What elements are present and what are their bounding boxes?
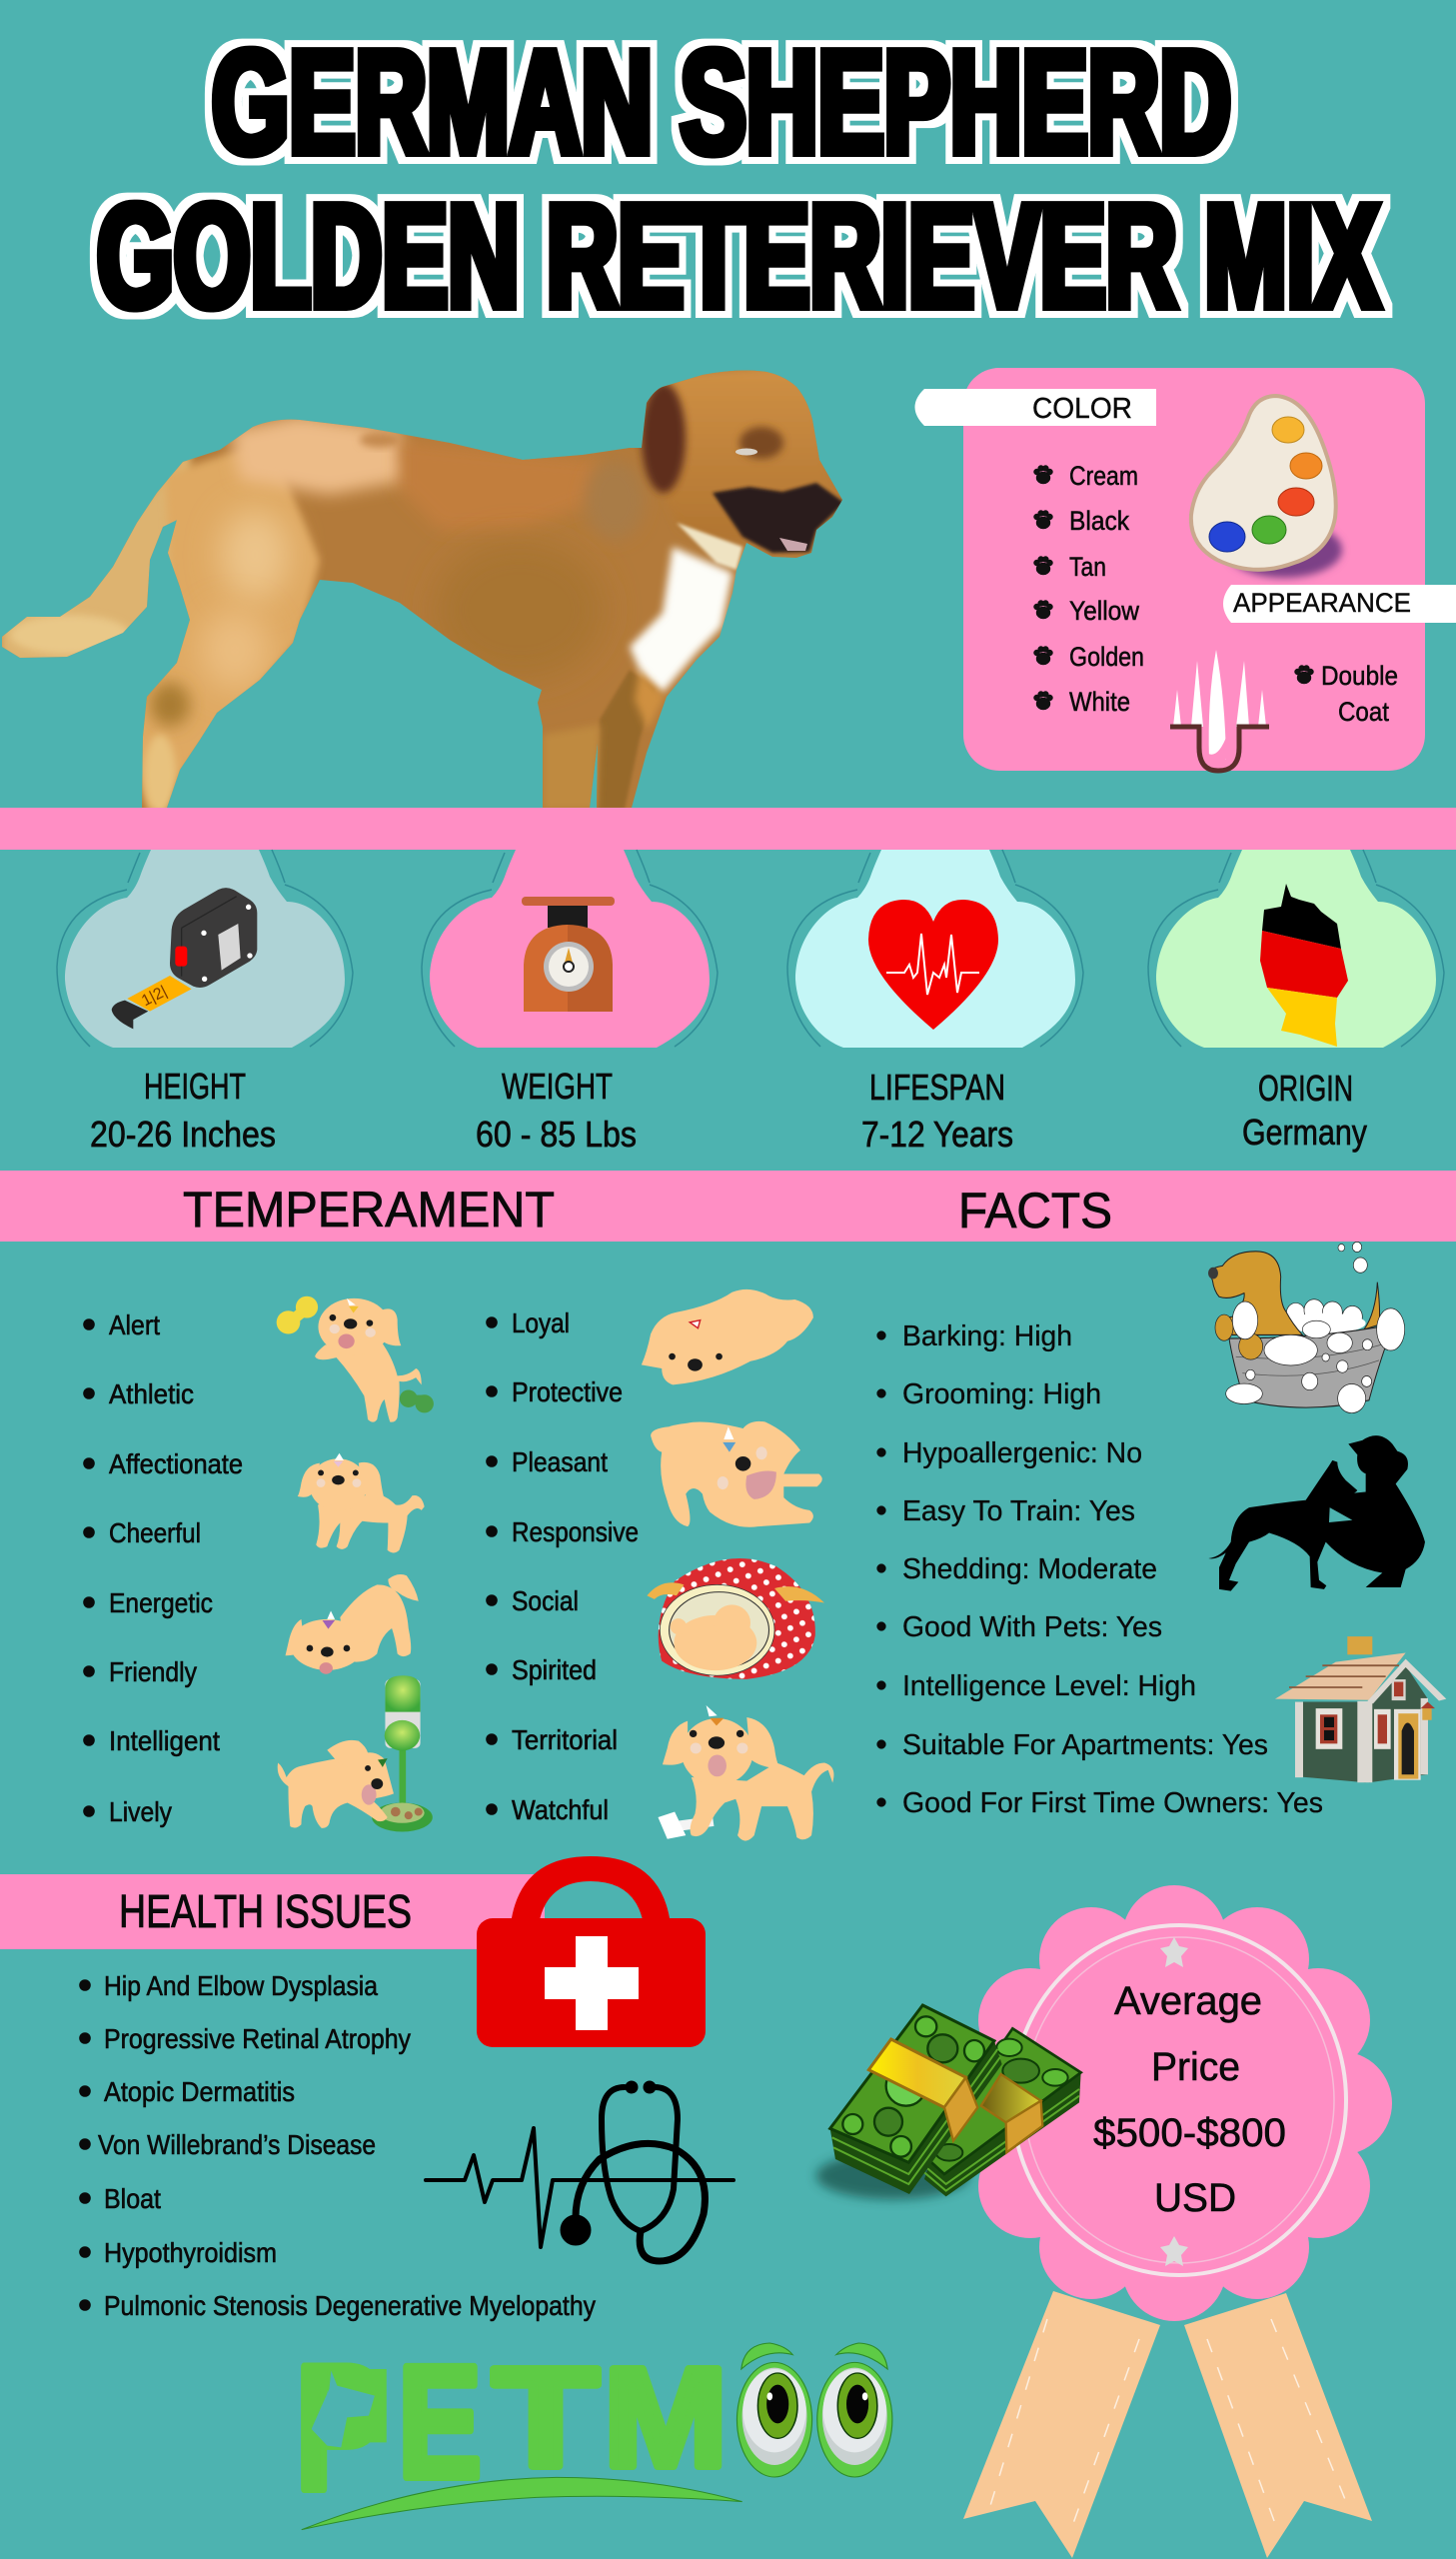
cloud [1148,850,1444,1048]
temperament list left: Cheerful [109,1517,201,1548]
price text: Price [1151,2045,1240,2089]
wordmark: E [398,2332,482,2511]
temperament list right: Watchful [512,1794,609,1825]
logo: petmoo [295,2328,892,2530]
weight label: WEIGHT [502,1066,613,1107]
temperament list left: Intelligent [109,1725,220,1756]
weight label [476,1066,637,1155]
title [97,20,1380,339]
facts list: Hypoallergenic: No [902,1437,1142,1469]
icon: puppy at water feeder [278,1675,433,1832]
price text: $500-$800 [1093,2111,1286,2155]
wordmark [295,2328,728,2527]
icon: playful puppy [286,1574,419,1674]
origin label: Germany [1242,1112,1367,1153]
ribbon tails [963,2291,1372,2558]
facts list: Barking: High [902,1320,1072,1352]
temperament list left: Energetic [109,1587,213,1618]
puppy illustrations [277,1289,833,1841]
color list: Black [1069,506,1129,536]
icon: stack of cash [816,2005,1081,2199]
stars [1160,1937,1188,2266]
icon: house [1275,1636,1446,1782]
temperament list right: Territorial [512,1724,618,1755]
origin label: ORIGIN [1258,1068,1353,1109]
icon: germany flag map [1260,884,1348,1047]
health issues list: Atopic Dermatitis [104,2076,295,2107]
color tab [915,389,1156,426]
price text: USD [1154,2176,1236,2220]
icon: standing puppy [298,1453,425,1553]
lifespan label: LIFESPAN [869,1067,1005,1108]
health issues list [80,1970,596,2321]
height label: HEIGHT [144,1066,246,1107]
cloud [422,850,718,1048]
health issues list: Hypothyroidism [104,2237,277,2268]
icon: dog in bath [1208,1242,1405,1413]
stat: origin [1148,850,1444,1153]
section band: temperament and facts: FACTS [958,1183,1112,1239]
price rosette [956,1885,1392,2558]
height label [90,1066,276,1155]
swoosh [302,2477,742,2530]
temperament list right: Responsive [512,1516,639,1547]
health issues list: Pulmonic Stenosis Degenerative Myelopathy [104,2290,596,2321]
price text [1093,1979,1286,2220]
icon: tape measure [112,888,257,1029]
facts list: Suitable For Apartments: Yes [902,1729,1268,1761]
temperament list right: Pleasant [512,1446,608,1477]
color list: Yellow [1069,596,1139,626]
temperament list left: Affectionate [109,1448,243,1479]
weight label: 60 - 85 Lbs [476,1114,637,1155]
cloud [57,850,353,1048]
icon: hair follicle [1170,650,1269,771]
lifespan label [861,1067,1013,1155]
temperament list right: Spirited [512,1654,597,1685]
appearance text [1295,661,1398,727]
appearance text: Coat [1338,697,1389,727]
section band: temperament and facts: TEMPERAMENT [183,1182,555,1238]
facts list: Good With Pets: Yes [902,1611,1162,1643]
logo artwork [302,2343,892,2530]
temperament list right: Protective [512,1376,623,1407]
icon: tape measure: 1|2| [139,983,170,1010]
origin label [1242,1068,1367,1153]
temperament list right [486,1307,639,1825]
top pink band [0,808,1456,850]
wordmark: P [295,2328,387,2527]
health issues list: Von Willebrand’s Disease [98,2129,376,2160]
health issues heading band [0,1874,545,1949]
color list: White [1069,687,1130,717]
temperament list right: Social [512,1585,579,1616]
temperament list left: Athletic [109,1378,194,1409]
facts list: Grooming: High [902,1378,1101,1410]
icon: kitchen scale [522,897,615,1012]
icon: heart with pulse [868,900,998,1030]
eyebrows [741,2343,887,2369]
icon: paint palette [1191,396,1342,578]
stat: weight [422,850,718,1155]
section band: temperament and facts [0,1171,1456,1242]
icon: puppy with bone [658,1705,833,1841]
stat: lifespan [787,850,1083,1155]
facts list [877,1320,1323,1819]
stat: height [57,850,353,1155]
panel: color and appearance [915,368,1456,771]
cloud [787,850,1083,1048]
health issues list: Bloat [104,2183,161,2214]
icon: stethoscope with pulse line [426,2081,733,2261]
appearance tab [1223,585,1456,623]
icon: puppy rolling [651,1421,822,1527]
left eye [736,2362,812,2477]
temperament list left: Lively [109,1796,172,1827]
color tab: COLOR [1032,393,1132,425]
wordmark: M [604,2338,728,2496]
icon: puppy with toys [277,1296,434,1422]
facts illustrations [1208,1242,1446,1782]
facts list: Good For First Time Owners: Yes [902,1787,1323,1819]
facts list: Easy To Train: Yes [902,1495,1135,1527]
color list: Tan [1069,552,1106,582]
health issues heading band: HEALTH ISSUES [119,1885,412,1937]
icon: first aid kit [477,1856,706,2047]
color list: Cream [1069,461,1138,491]
health issues list: Progressive Retinal Atrophy [104,2023,411,2054]
icon: silhouette of trainer and dog [1208,1435,1425,1591]
temperament list left [84,1309,243,1827]
lifespan label: 7-12 Years [861,1114,1013,1155]
facts list: Intelligence Level: High [902,1670,1196,1702]
scalloped badge [956,1885,1392,2321]
temperament list left: Alert [109,1309,160,1340]
dog photo [0,360,859,815]
height label: 20-26 Inches [90,1114,276,1155]
icon: puppy in bed [647,1558,824,1679]
appearance tab: APPEARANCE [1233,588,1411,618]
icon: puppy lying down [642,1289,813,1384]
temperament list left: Friendly [109,1656,197,1687]
facts list: Shedding: Moderate [902,1553,1157,1585]
right eye [817,2362,892,2477]
appearance text: Double [1321,661,1398,691]
wordmark: T [493,2338,599,2496]
health issues list: Hip And Elbow Dysplasia [104,1970,378,2001]
color list [1033,461,1144,717]
temperament list right: Loyal [512,1307,570,1338]
price text: Average [1114,1979,1262,2023]
color list: Golden [1069,642,1144,672]
